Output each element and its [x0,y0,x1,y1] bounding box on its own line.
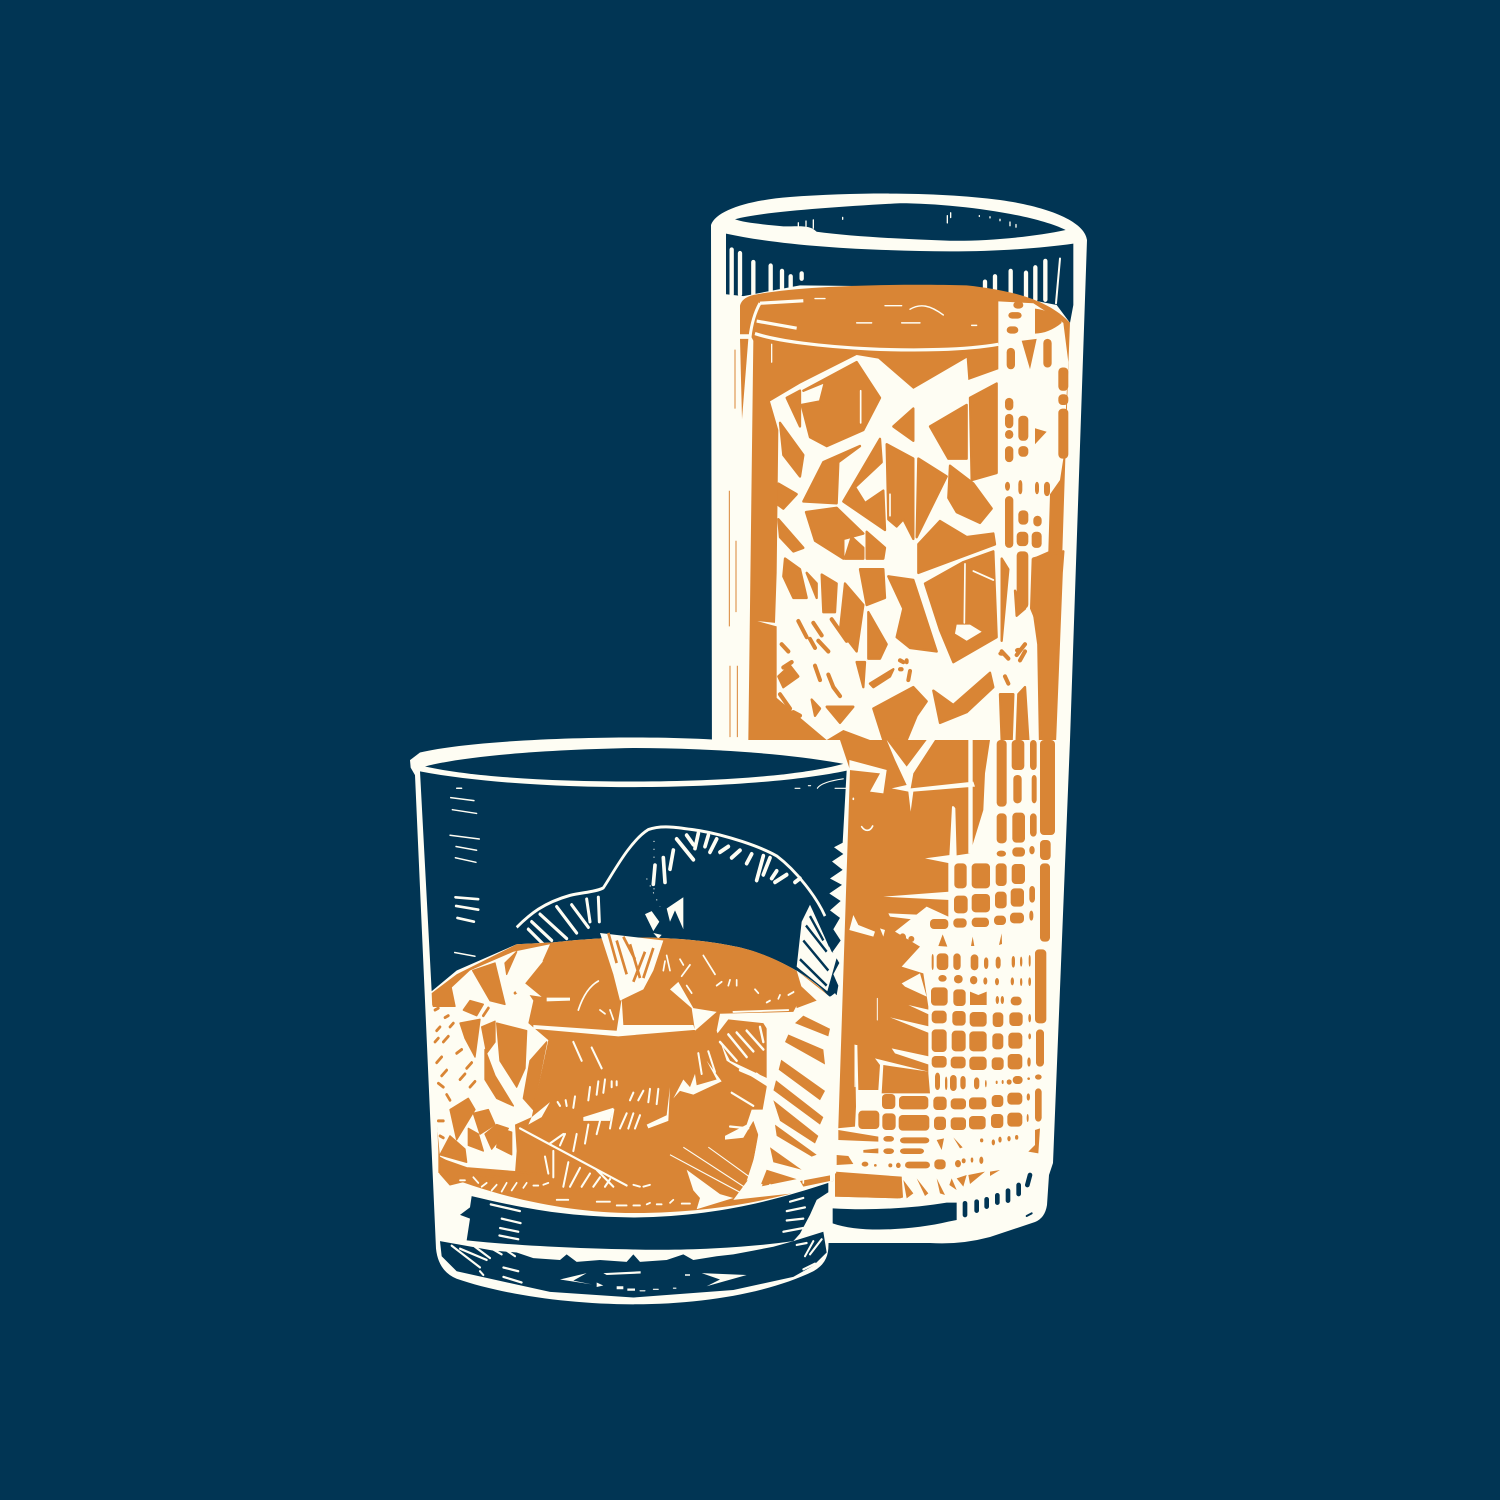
liquid bottom dashes [460,1177,803,1205]
cube lower right [725,1110,777,1181]
central wavy cream [528,1061,722,1128]
surface highlight marks [578,956,795,1019]
base left and right swirls [452,1239,822,1283]
ice hatch marks [653,833,800,884]
base floor reflections [560,1271,747,1291]
left orange details [855,998,877,1087]
thick glass base [460,1183,828,1250]
surface cream hatch [512,961,570,1001]
ice centre highlights [645,897,683,939]
grid cells [835,740,1055,1198]
top cream strokes [849,740,975,853]
ice and hatched cream mass [757,301,1068,740]
right liquid hatch mass [717,971,840,1200]
bottom band [833,1203,957,1229]
short rocks glass [410,738,848,1304]
ice cube facets [778,362,1063,740]
rocks glass silhouette [410,738,848,1304]
lower liquid [835,740,1055,1198]
tall highball glass [711,194,1087,1243]
tall glass upper part [726,203,1073,740]
left tick marks [450,788,479,956]
cube edge line [533,982,717,1036]
rim dots [740,750,766,751]
surface central cream cluster [600,933,663,1001]
liquid [432,937,833,1213]
left mottled ice mass [432,944,550,1177]
mottled ice bits [780,619,1025,716]
right side cream grid mass [835,740,1060,1205]
right hatch marks [720,1027,770,1078]
tall glass silhouette [711,194,1087,1243]
liquid [740,285,1070,740]
liquid side sliver [740,339,748,419]
right orange stripes [717,974,830,1187]
lower base cavity [440,1232,827,1298]
rim streak [460,746,727,753]
large ice outline [517,827,825,927]
rim highlights [798,213,1016,228]
right ice patch [797,905,837,991]
diagonal ice edge and lower hatches [520,1128,627,1187]
right column cells [998,301,1068,656]
rim opening [425,748,843,781]
left glass lines [729,350,737,737]
surface orange inside hatch [608,933,653,982]
glass interior above liquid [420,771,847,997]
bottom dashes [965,1175,1030,1215]
left mottled dots [435,989,520,1138]
top right rim marks [795,779,848,788]
rim drips [732,250,1045,300]
rim opening [735,203,1066,241]
ice highlights [861,391,993,623]
surface highlights [772,299,977,362]
left mottled facets [433,952,547,1185]
tall glass lower part [833,740,1060,1229]
base tick marks [491,1198,805,1239]
central liquid hatch [550,1042,753,1151]
navy band below rim [726,234,1073,323]
liquid surface [750,301,998,350]
